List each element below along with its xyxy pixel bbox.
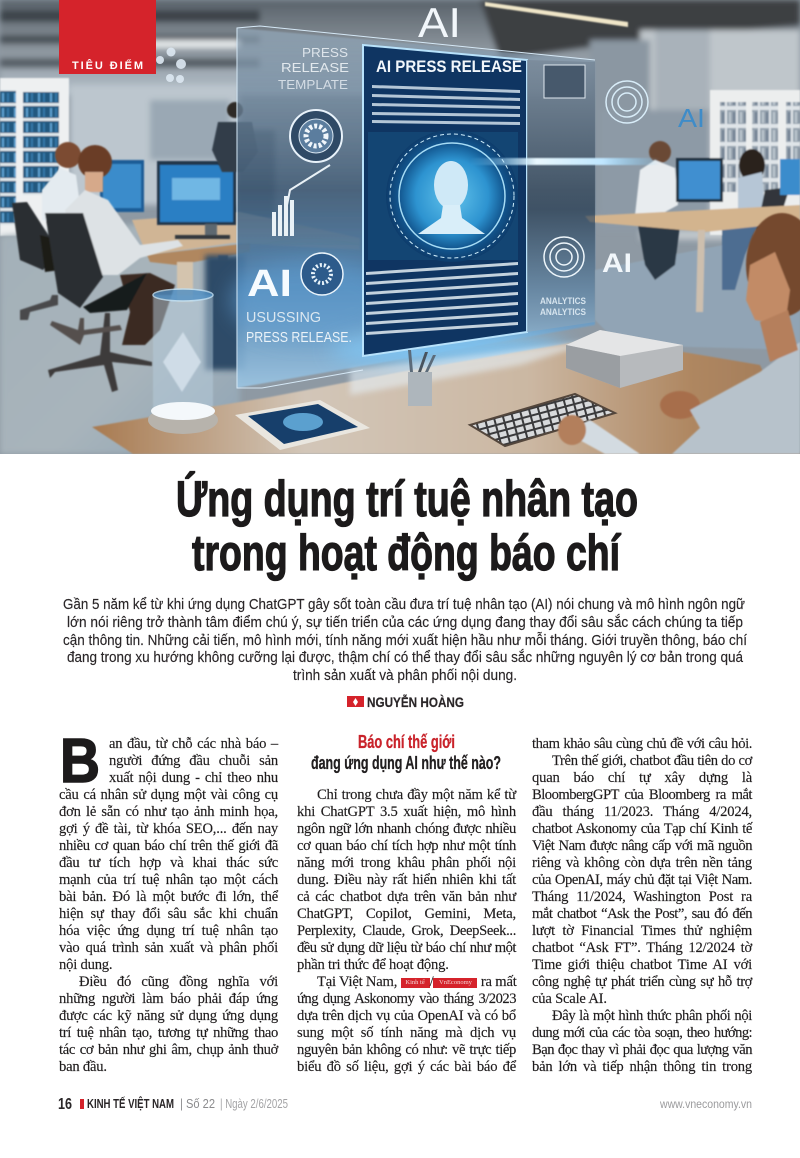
body column 3: của Scale AI.	[532, 991, 607, 1007]
lens flare	[470, 158, 660, 165]
panel subtitle	[247, 312, 351, 342]
body column 2	[296, 787, 517, 1075]
panel labels: TEMPLATE	[278, 77, 348, 92]
panel labels: PRESS	[302, 45, 348, 60]
body column 1: hóa việc ứng dụng trí tuệ nhân tạo	[59, 923, 278, 939]
standfirst paragraph: đang trong xu hướng không cưỡng lại được, thậm chí có thể thay đổi sâu sắc những nguyên lý cơ bản trong quá	[67, 649, 744, 666]
image background texture	[368, 132, 518, 260]
body column 3: quan báo chí tự xây dựng là	[532, 770, 752, 786]
panel labels: RELEASE	[281, 60, 349, 75]
foreground desk	[92, 338, 800, 454]
body column 2: Chỉ trong chưa đầy một năm kể từ	[317, 787, 516, 803]
body column 1: những người làm báo phải đáp ứng	[59, 991, 278, 1007]
left monitors	[100, 160, 236, 239]
keyboard	[470, 394, 615, 446]
desk glow	[350, 340, 600, 395]
body column 1: ban đầu.	[59, 1059, 107, 1075]
body column 1: đầu tư tích hợp và khai thác sức	[59, 855, 278, 871]
profile disc	[386, 130, 518, 262]
right monitors	[676, 158, 800, 202]
title	[176, 471, 638, 581]
body column 2: ngôn ngữ lớn nhanh chóng được nhiều	[297, 821, 516, 837]
pen holder	[408, 350, 436, 406]
right office scene	[585, 90, 800, 350]
office background wall and ceiling	[0, 0, 800, 240]
subheading: Báo chí thế giới: đang ứng dụng AI như thế nào?	[311, 753, 501, 773]
body column 3: công nghệ tự phát triển cùng sự hỗ trợ	[532, 974, 752, 990]
analytics label	[540, 296, 586, 317]
body column 2: cơ quan báo chí tích hợp như một tính	[297, 838, 516, 854]
body column 1: gợi ý đề tài, từ khóa SEO,... đến nay	[59, 821, 278, 837]
ceiling light strip	[485, 2, 628, 27]
body column 2: dựa trên dịch vụ của OpenAI và có bổ	[297, 1008, 516, 1024]
panel labels	[278, 48, 348, 89]
body column 3: của OpenAI, máy chủ đặt tại Việt Nam.	[532, 872, 752, 888]
body column 1: được các kỹ năng sử dụng ứng dụng	[59, 1008, 278, 1024]
tablet	[235, 400, 370, 450]
drop cap: B	[60, 727, 100, 796]
bar chart icon	[272, 165, 330, 236]
seated woman	[65, 145, 183, 345]
section tag: Tiêu điểm	[59, 0, 156, 74]
magazine name: KINH TẾ VIỆT NAM	[87, 1096, 174, 1111]
title: Ứng dụng trí tuệ nhân tạo	[176, 471, 638, 527]
cylinder base	[148, 402, 218, 434]
body column 2: nguyên bản không có như: vẽ trực tiếp	[297, 1042, 516, 1058]
body column 3: BloombergGPT của Bloomberg ra mắt	[532, 787, 752, 803]
large AI lettering above document: AI	[418, 0, 461, 46]
body column 2: VnEconomy	[439, 979, 472, 986]
top text lines	[372, 85, 520, 125]
body column 2: phần tri thức để hoạt động.	[297, 957, 449, 973]
hologram cylinder	[153, 289, 213, 410]
body column 1	[58, 736, 279, 1075]
body column 1: người đứng đầu chuỗi sản	[109, 753, 278, 769]
left office workers	[12, 102, 258, 392]
author name: NGUYỄN HOÀNG	[367, 695, 464, 710]
left chair	[12, 202, 60, 320]
side analytics panel	[527, 60, 705, 332]
analytics label: ANALYTICS	[540, 307, 586, 317]
thumbnail chart	[544, 65, 585, 98]
issue date: | Ngày 2/6/2025	[220, 1097, 288, 1111]
body column 2: biểu đồ số liệu, gợi ý các bài báo để	[297, 1059, 516, 1075]
website: www.vneconomy.vn	[659, 1099, 752, 1111]
body column 3: đầu tháng 11/2023. Tháng 4/2024,	[532, 804, 752, 820]
byline	[347, 695, 464, 710]
body column 1: hiện sự thay đổi sâu sắc khi chuẩn	[59, 906, 278, 922]
body column 2: đều sử dụng dữ liệu từ báo chí như một	[297, 940, 516, 956]
body column 3: Đây là một hình thức phân phối nội	[552, 1008, 752, 1024]
body column 1: trí tuệ nhân tạo, tương tự những thao	[59, 1025, 278, 1041]
body column 3: lượt tờ Financial Times thử nghiệm	[532, 923, 752, 939]
standfirst paragraph: trình sản xuất và phân phối nội dung.	[293, 667, 517, 684]
right floor	[595, 246, 800, 349]
right workers	[635, 141, 790, 290]
issue number: | Số 22	[180, 1097, 215, 1111]
bottom text lines	[366, 262, 518, 335]
body column 3: Time giới thiệu chatbot Time AI với	[532, 957, 752, 973]
body column 1: cầu cá nhân sử dụng một vài công cụ	[59, 787, 278, 803]
body column 3: Bạn đọc thay vì phải đọc qua lượng văn	[532, 1042, 752, 1058]
subheading: Báo chí thế giới: Báo chí thế giới	[358, 732, 455, 752]
concentric icon lower	[544, 237, 584, 277]
right desk	[585, 205, 800, 312]
foreground person	[558, 213, 800, 454]
body column 3: dung mới của các tòa soạn, theo hướng:	[532, 1025, 752, 1041]
icon: molecule dots next to tag	[156, 48, 186, 83]
title: trong hoạt động báo chí	[192, 525, 622, 581]
body column 3: bản lớn và tiếp nhận thông tin trong	[532, 1059, 752, 1075]
body column 3: Trên thế giới, chatbot đầu tiên do cơ	[552, 753, 752, 769]
body column 1: nhiều cơ quan báo chí trên thế giới đã	[59, 838, 278, 854]
body column 2: dung. Điều này rất hiển nhiên khi tất	[297, 872, 516, 888]
body column 2: năng mới trong khâu phân phối nội	[297, 855, 516, 871]
concentric icon	[606, 81, 648, 123]
body column 3	[532, 736, 753, 1075]
body column 3: chatbot Askonomy của Tạp chí Kinh tế	[532, 821, 752, 837]
body column 3: Tháng 11/2024, Washington Post ra	[532, 889, 752, 905]
panel subtitle: PRESS RELEASE.	[246, 329, 352, 346]
small AI label: AI	[602, 248, 632, 278]
page number: 16	[58, 1096, 72, 1113]
left desk	[132, 212, 334, 302]
body column 2: khi ChatGPT 3.5 xuất hiện, mô hình	[297, 804, 516, 820]
seated man	[42, 142, 81, 225]
blue haze behind hologram	[205, 255, 245, 370]
left bookshelf	[0, 78, 69, 236]
subheading: Báo chí thế giới	[311, 732, 501, 773]
body column 2: ứng dụng Askonomy vào tháng 3/2023	[297, 991, 516, 1007]
body column 3: chatbot “Ask FT”. Tháng 12/2024 tờ	[532, 940, 752, 956]
body column 2: Kinh tế	[405, 979, 425, 986]
body column 1: vào quá trình sản xuất và phân phối	[59, 940, 278, 956]
body column 1: bài bản. Đó là một bước đi lớn, thể	[59, 889, 278, 905]
holographic panel	[230, 26, 595, 388]
body column 1: xuất nội dung - chỉ theo nhu	[109, 770, 278, 786]
analytics label: ANALYTICS	[540, 296, 586, 306]
body column 2: cả các chatbot dựa trên văn bản như	[297, 889, 516, 905]
footer	[58, 1096, 752, 1113]
body column 2: sung một số tính năng mà dịch vụ	[297, 1025, 516, 1041]
body column 3: tham khảo sâu cùng chủ đề với câu hỏi.	[532, 736, 752, 752]
standfirst paragraph	[63, 596, 748, 684]
standing man	[212, 102, 258, 172]
left floor	[0, 215, 240, 454]
right bookshelf	[710, 90, 800, 235]
body column 1: mạnh của trí tuệ nhân tạo một cách	[59, 872, 278, 888]
glowing AI badge	[248, 252, 344, 296]
body column 2: ChatGPT, Copilot, Gemini, Meta,	[297, 906, 516, 922]
red bar	[80, 1099, 84, 1109]
hero illustration: AI press release office	[0, 0, 800, 454]
body column 1: nội dung.	[59, 957, 112, 973]
main chair	[45, 213, 152, 392]
server box	[566, 330, 683, 388]
blue AI sign: AI	[678, 103, 705, 133]
glowing AI badge: AI	[247, 263, 292, 305]
body column 1: đơn lẻ sẵn có như tạo ảnh minh họa,	[59, 804, 278, 820]
body column 2: Tại Việt Nam, / ra mất	[317, 974, 517, 990]
panel subtitle: USUSSING	[246, 309, 321, 326]
body column 1: an đầu, từ chỗ các nhà báo –	[109, 736, 278, 752]
body column 1: tác cơ bản như ghi âm, chụp ảnh thuở	[59, 1042, 278, 1058]
body column 3: riêng và không còn dựa trên nền tảng	[532, 855, 752, 871]
central press release document	[363, 45, 527, 356]
body column 2: Perplexity, Claude, Grok, DeepSeek...	[297, 923, 516, 939]
body column 1: Điều đó cũng đồng nghĩa với	[79, 974, 278, 990]
icon: pen nib on red square	[347, 696, 364, 707]
body column 3: mắt chatbot “Ask the Post”, sau đó đến	[532, 906, 752, 922]
document title: AI PRESS RELEASE	[376, 57, 522, 76]
standfirst paragraph: lớn nói riêng trở thành tâm điểm chú ý, sự tiến triển của các ứng dụng đang thay đổi sâu sắc cách chúng ta tiếp	[67, 614, 743, 631]
section tag: Tiêu điểm: TIÊU ĐIỂM	[72, 59, 143, 72]
gear icon	[290, 110, 342, 162]
body column 3: Việt Nam được nâng cấp với mã nguồn	[532, 838, 752, 854]
